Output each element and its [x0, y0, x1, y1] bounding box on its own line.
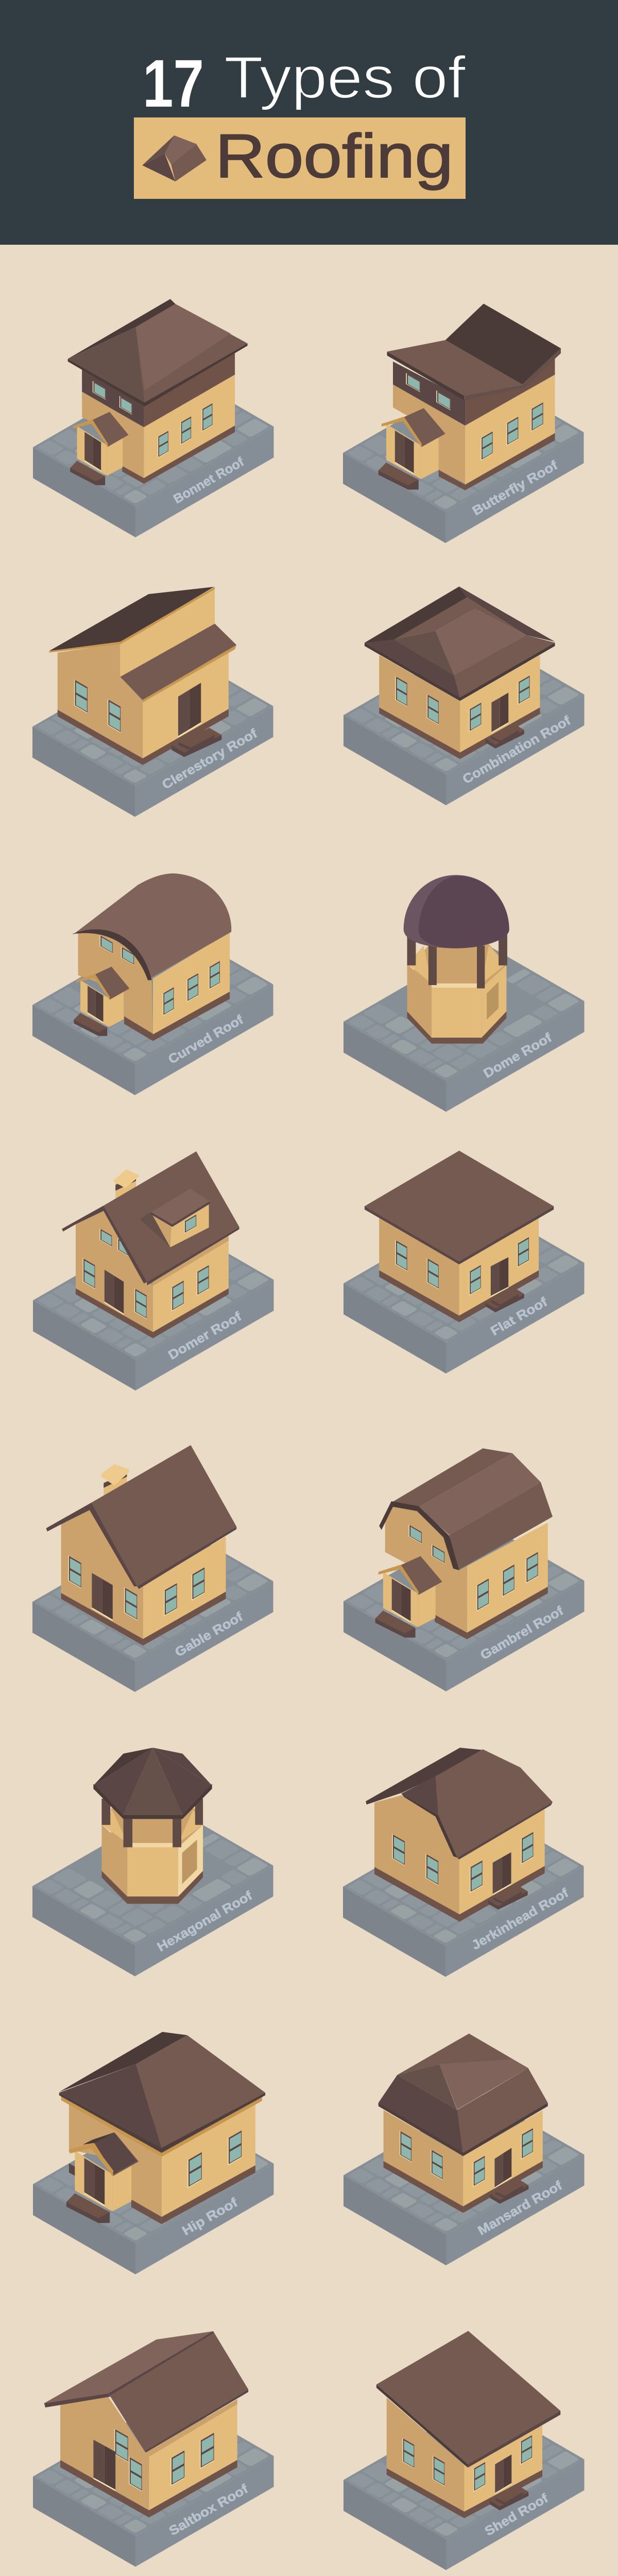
- label: Shed Roof: [482, 2491, 551, 2539]
- house: [366, 1748, 553, 1922]
- house: [46, 1445, 236, 1646]
- platform: [344, 2400, 584, 2570]
- panel: Curved Roof: [32, 873, 273, 1095]
- label: Dome Roof: [481, 1030, 555, 1081]
- panel: Gable Roof: [32, 1445, 273, 1692]
- label: Hexagonal Roof: [154, 1888, 255, 1955]
- platform: [32, 647, 273, 817]
- house: [62, 1151, 239, 1338]
- house: [72, 873, 231, 1041]
- title plate: Roofing: [134, 117, 466, 199]
- label: Butterfly Roof: [470, 458, 560, 518]
- label: Clerestory Roof: [160, 726, 260, 792]
- platform: [344, 1521, 584, 1691]
- panel: Bonnet Roof: [33, 299, 274, 537]
- house: [365, 586, 555, 759]
- house: [365, 1150, 554, 1322]
- panel: Clerestory Roof: [32, 587, 273, 817]
- label: Gable Roof: [173, 1609, 246, 1660]
- label: Combination Roof: [460, 713, 573, 787]
- house: [379, 303, 561, 490]
- platform: [33, 1221, 274, 1391]
- panel: Gambrel Roof: [344, 1448, 584, 1691]
- panel: Saltbox Roof: [33, 2331, 274, 2567]
- header band: [0, 0, 618, 245]
- panel: Shed Roof: [344, 2331, 584, 2570]
- platform: [33, 367, 274, 537]
- label: Hip Roof: [180, 2195, 241, 2239]
- panel: Mansard Roof: [344, 2033, 584, 2265]
- platform: [32, 1522, 273, 1692]
- panel: Hexagonal Roof: [32, 1748, 273, 1976]
- title: 17 Types of: [143, 45, 466, 121]
- platform: [33, 2397, 274, 2567]
- panel: Butterfly Roof: [343, 303, 584, 543]
- label: Mansard Roof: [475, 2178, 565, 2238]
- platform: [344, 1204, 584, 1374]
- house: [376, 2331, 560, 2518]
- panel: Jerkinhead Roof: [343, 1748, 584, 1977]
- house: [44, 2331, 248, 2518]
- label: Curved Roof: [166, 1012, 246, 1067]
- house: [379, 2033, 548, 2213]
- panel: Combination Roof: [344, 586, 584, 805]
- label: Saltbox Roof: [167, 2482, 251, 2538]
- house: [49, 587, 236, 765]
- label: Domer Roof: [166, 1309, 244, 1363]
- panel: Domer Roof: [33, 1151, 274, 1391]
- house: [375, 1448, 553, 1639]
- panel: Flat Roof: [344, 1150, 584, 1374]
- platform: [344, 942, 584, 1112]
- heading: Roofing: Roofing: [215, 122, 453, 191]
- label: Flat Roof: [488, 1295, 550, 1338]
- platform: [344, 635, 584, 805]
- platform: [32, 1806, 273, 1976]
- title: 17 Types of: 17: [143, 45, 204, 121]
- house: [59, 2032, 265, 2224]
- platform: [32, 925, 273, 1095]
- panel: Hip Roof: [33, 2032, 274, 2274]
- house: [68, 299, 248, 485]
- panel: Dome Roof: [344, 875, 584, 1112]
- platform: [343, 373, 584, 543]
- platform: [343, 1807, 584, 1977]
- label: Gambrel Roof: [478, 1603, 566, 1663]
- label: Jerkinhead Roof: [469, 1886, 571, 1953]
- label: Bonnet Roof: [171, 454, 247, 506]
- house: [93, 1748, 212, 1904]
- platform: [344, 2095, 584, 2265]
- icon: roof: [142, 135, 207, 181]
- platform: [33, 2104, 274, 2274]
- title: 17 Types of: Types of: [224, 45, 466, 111]
- house: [404, 875, 509, 1044]
